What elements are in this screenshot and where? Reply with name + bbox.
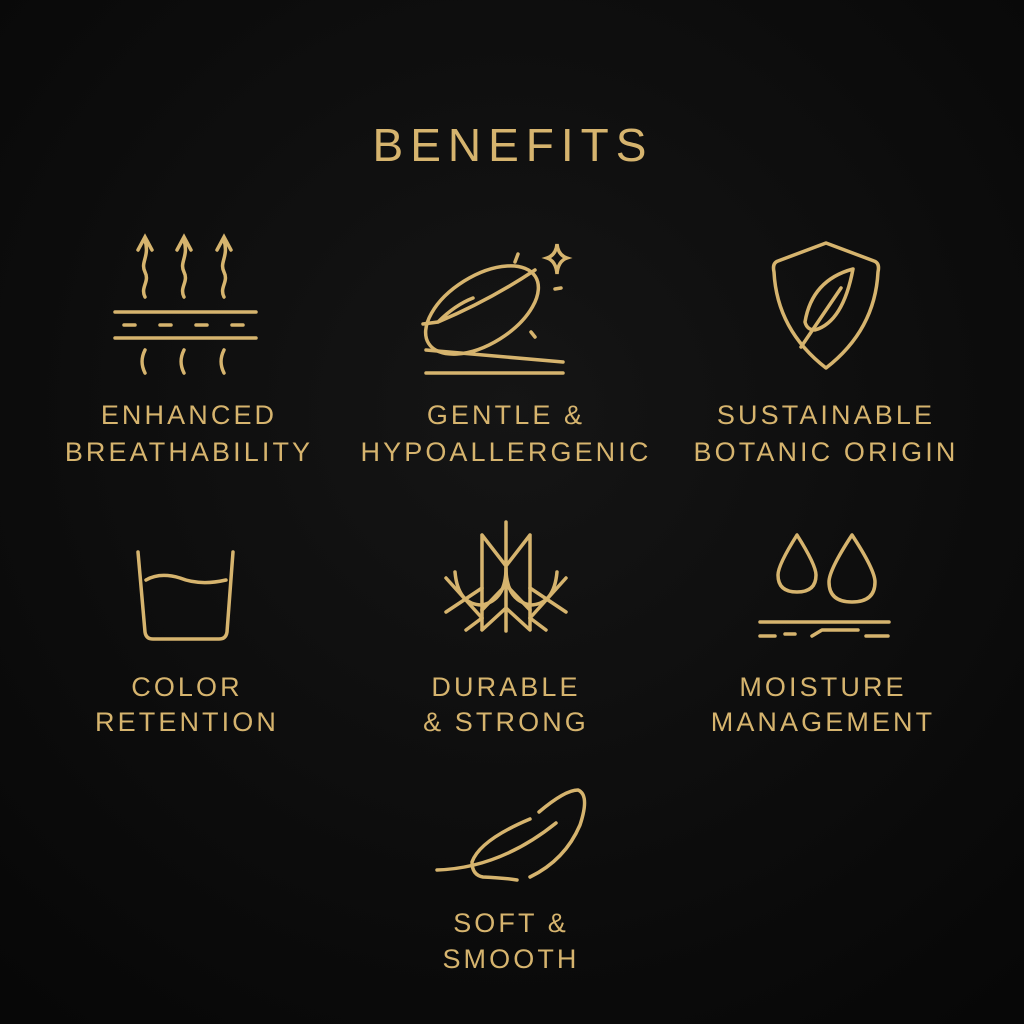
label: moisture: MOISTURE: [739, 672, 907, 702]
label: breathability: ENHANCED: [101, 400, 277, 430]
label: sustainable: BOTANIC ORIGIN: [694, 437, 958, 467]
icon: moisture drops: [760, 535, 889, 636]
label: sustainable: SUSTAINABLE: [717, 400, 935, 430]
label: color retention: RETENTION: [95, 707, 279, 737]
icon: breathability: [115, 237, 256, 373]
label: durable: & STRONG: [423, 707, 589, 737]
label: gentle: HYPOALLERGENIC: [361, 437, 651, 467]
label: color retention: COLOR: [131, 672, 243, 702]
label: soft smooth: SMOOTH: [442, 944, 580, 974]
icon: wheat: [446, 522, 566, 631]
label: gentle: GENTLE &: [427, 400, 585, 430]
label: durable: DURABLE: [431, 672, 581, 702]
label: breathability: BREATHABILITY: [65, 437, 313, 467]
icon: cup: [138, 552, 233, 639]
title: BENEFITS: [373, 119, 653, 171]
icon: shield leaf: [774, 243, 878, 368]
icon: gentle hypoallergenic: [411, 244, 567, 373]
label: soft smooth: SOFT &: [453, 908, 569, 938]
label: moisture: MANAGEMENT: [711, 707, 935, 737]
icon: feather: [437, 790, 585, 880]
